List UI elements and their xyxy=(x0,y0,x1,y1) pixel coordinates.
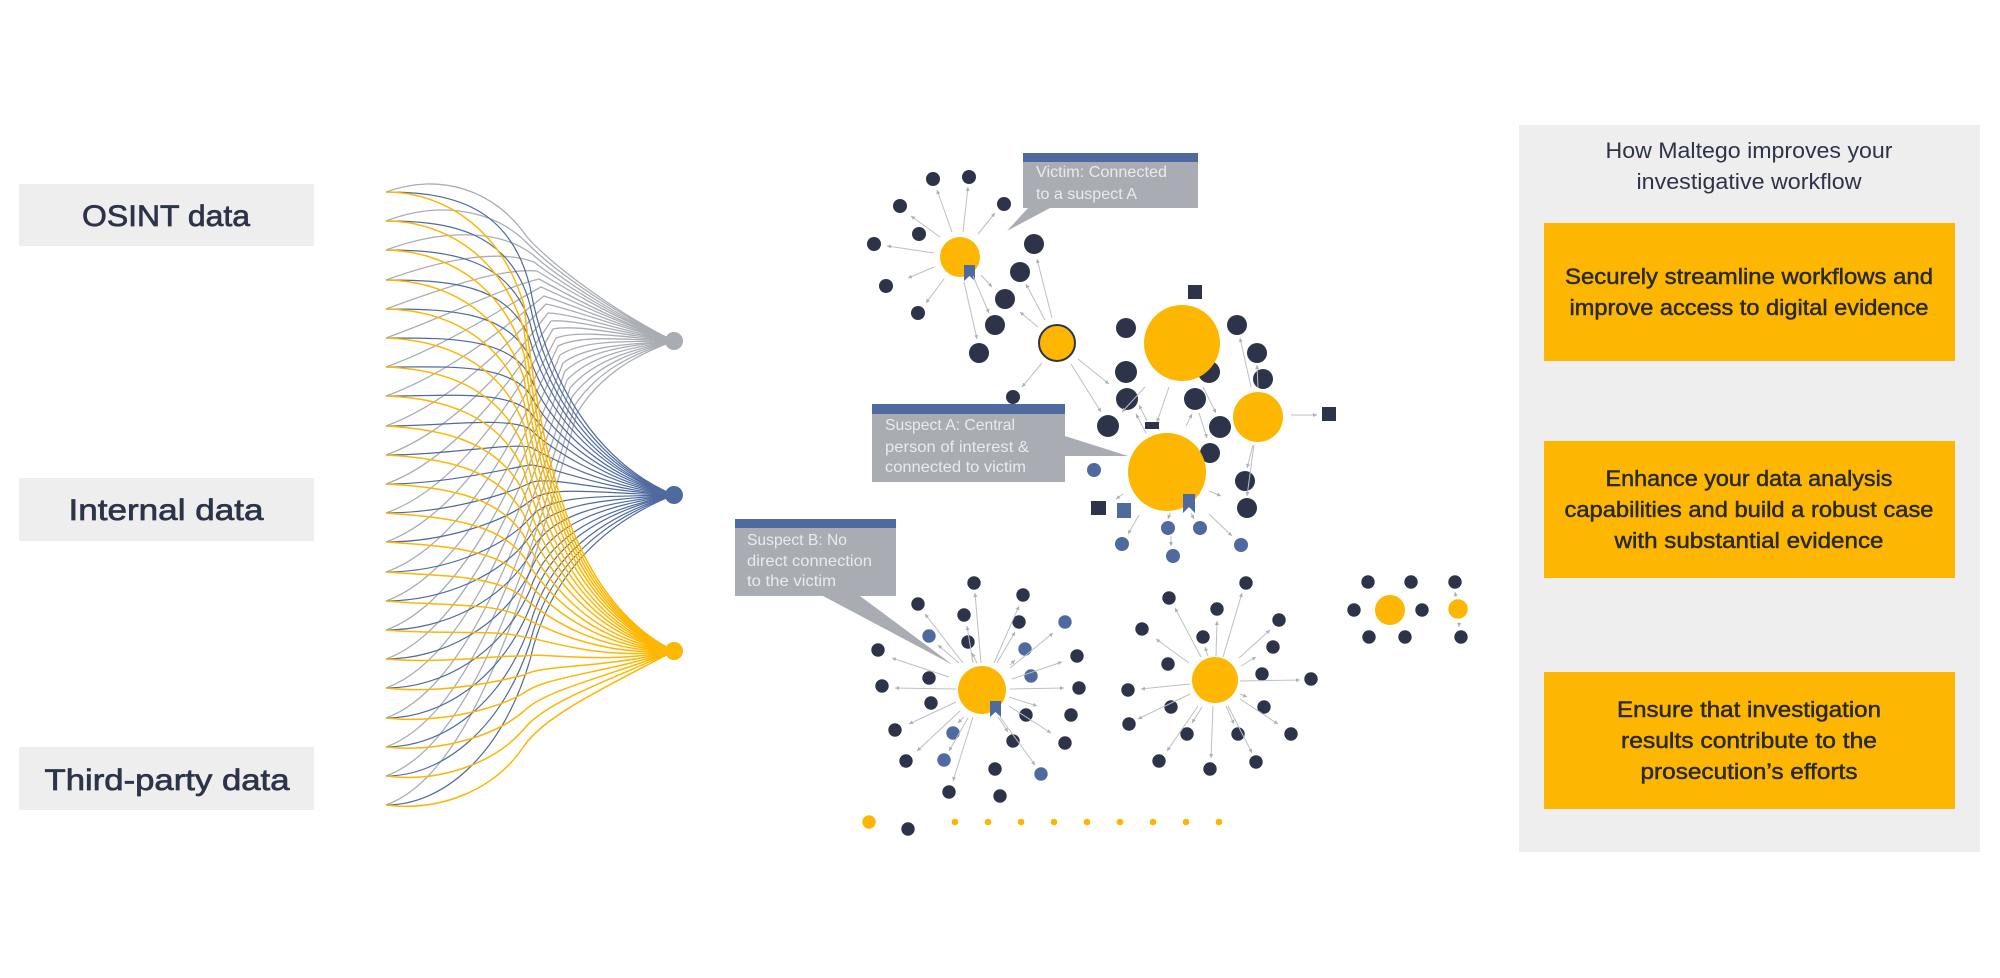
card: enhance analysis: capabilities and build a robust case xyxy=(1564,497,1934,522)
label: OSINT data xyxy=(19,184,314,246)
panel heading xyxy=(1606,138,1892,194)
label: Third-party data xyxy=(19,747,314,810)
callout: suspect B: Suspect B: No xyxy=(747,532,847,549)
card: prosecution results xyxy=(1544,672,1955,809)
gray curves to OSINT node xyxy=(386,184,674,805)
flow diagram: data sources converging on three nodes xyxy=(386,184,683,806)
cluster: small group right xyxy=(1347,575,1468,644)
card: prosecution results: results contribute to the xyxy=(1621,728,1877,753)
cluster: victim xyxy=(867,170,1109,412)
label: Third-party data: Third-party data xyxy=(44,764,290,797)
callout: victim: to a suspect A xyxy=(1036,186,1137,203)
blue curves to internal node xyxy=(386,192,674,805)
callout: suspect B xyxy=(735,519,953,665)
card: enhance analysis xyxy=(1544,441,1955,578)
node: gray xyxy=(665,332,683,350)
panel heading: investigative workflow xyxy=(1636,169,1862,194)
card: streamline workflows: improve access to digital evidence xyxy=(1570,295,1928,320)
label: Internal data: Internal data xyxy=(68,494,264,527)
callout: suspect A: Suspect A: Central xyxy=(885,417,1015,434)
cluster: suspect B xyxy=(871,576,1086,803)
callout: suspect A xyxy=(872,404,1128,482)
callout: victim xyxy=(1007,153,1198,231)
row of isolated nodes xyxy=(862,815,1222,836)
node: blue xyxy=(665,486,683,504)
panel: how Maltego improves your workflow xyxy=(1519,125,1980,852)
callout: victim: Victim: Connected xyxy=(1036,164,1167,181)
cluster: unnamed person xyxy=(1121,576,1318,776)
callout: suspect B: direct connection xyxy=(747,553,872,570)
label: OSINT data: OSINT data xyxy=(82,200,250,233)
card: enhance analysis: Enhance your data analysis xyxy=(1606,466,1892,491)
label: Internal data xyxy=(19,478,314,541)
node: yellow xyxy=(665,642,683,660)
card: streamline workflows: Securely streamline workflows and xyxy=(1565,264,1933,289)
card: prosecution results: Ensure that investigation xyxy=(1617,697,1881,722)
callout: suspect B: to the victim xyxy=(747,573,836,590)
card: streamline workflows xyxy=(1544,223,1955,361)
callout: suspect A: person of interest & xyxy=(885,439,1029,456)
card: prosecution results: prosecution’s efforts xyxy=(1640,759,1858,784)
panel heading: How Maltego improves your xyxy=(1606,138,1892,163)
yellow curves to third-party node xyxy=(386,192,674,806)
callout: suspect A: connected to victim xyxy=(885,459,1026,476)
card: enhance analysis: with substantial evidence xyxy=(1613,528,1884,553)
cluster: suspect A xyxy=(1087,285,1336,563)
